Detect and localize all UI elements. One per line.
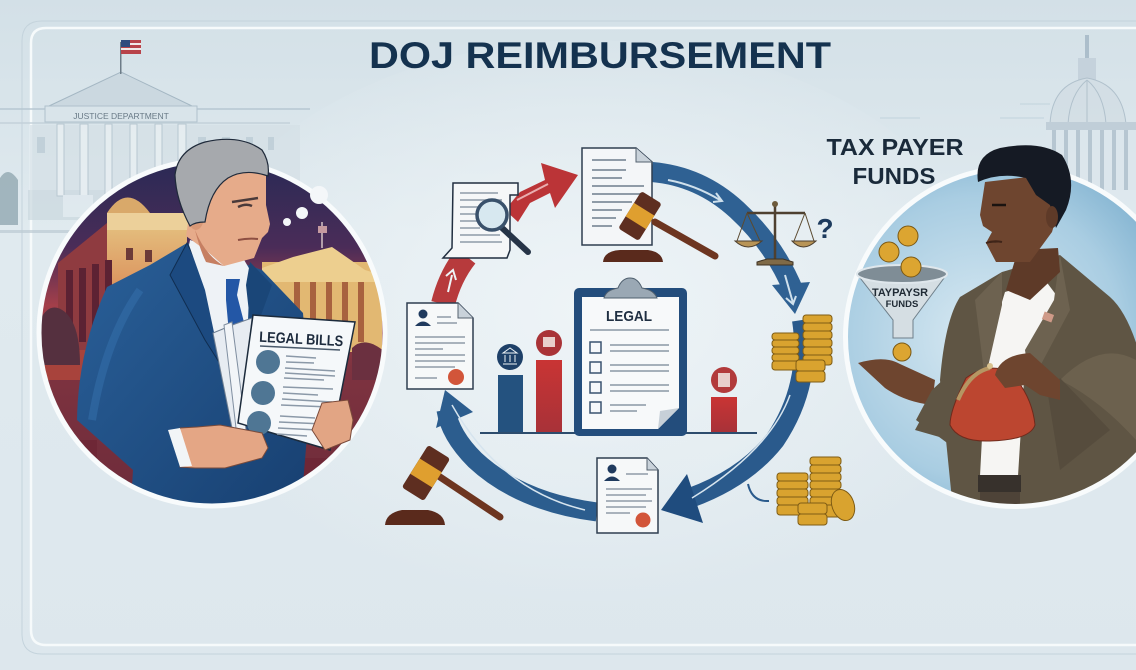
icon: left document with portrait: [407, 303, 473, 389]
head: young man: [977, 145, 1071, 300]
panel: taxpayer with funnel: FUNDS: [852, 163, 936, 189]
chart: center bars: [480, 330, 757, 433]
tax payer funds heading: TAX PAYER: [826, 134, 964, 160]
icon: coin stacks upper: [772, 315, 832, 382]
legal bills papers: [168, 315, 355, 468]
icon: funnel with coins: FUNDS: [886, 299, 918, 310]
document icons: [247, 350, 280, 435]
capitol dome: [880, 35, 1136, 190]
icon: red coin purse: [950, 353, 1060, 441]
icon: bottom document: [597, 458, 658, 533]
question mark: ?: [816, 213, 834, 244]
arrow: red to top document: [505, 163, 578, 222]
lower hand: [180, 425, 268, 468]
arrow: red lower curve: [443, 256, 466, 304]
panel: taxpayer with funnel: [826, 134, 1136, 512]
icon: funnel with coins: [857, 226, 947, 361]
funnel label: TAYPAYSR: [872, 287, 928, 299]
panel: official with legal bills: [37, 139, 387, 530]
arrow: blue lower left sweep: [436, 390, 597, 512]
person: [940, 255, 1136, 510]
justice department building: [0, 72, 310, 233]
arrow: blue top right curve: [652, 172, 810, 314]
icon: scales with question mark: [735, 201, 834, 265]
building sign: JUSTICE DEPARTMENT: [73, 111, 169, 121]
panel: legal clipboard: [574, 278, 687, 436]
chart: circular reimbursement flow: [385, 148, 859, 533]
government building background: [42, 198, 382, 380]
icon: gavel top: [603, 191, 715, 262]
open hand: [858, 359, 970, 445]
title: DOJ REIMBURSEMENT: [369, 35, 831, 76]
small curve: [748, 484, 769, 501]
head: grey haired man: [175, 139, 270, 266]
legal bills label: LEGAL BILLS: [259, 329, 344, 350]
clipboard label: LEGAL: [606, 308, 652, 325]
suit body: [77, 243, 310, 520]
icon: top document: [582, 148, 652, 245]
arrow: blue lower right sweep: [661, 320, 804, 523]
icon: magnifier document: [443, 183, 528, 258]
thought bubbles: [283, 186, 328, 226]
upper hand: [312, 400, 353, 450]
icon: coin stacks lower: [777, 457, 859, 525]
icon: gavel bottom: [385, 445, 500, 525]
checklist: [590, 330, 669, 413]
icon: flag: [120, 40, 141, 74]
